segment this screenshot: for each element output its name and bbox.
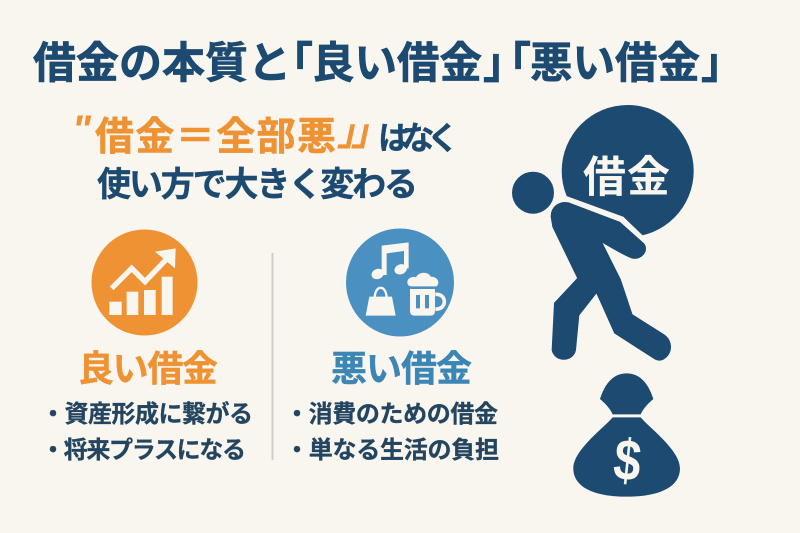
list: bad debt: ・消費のための借金	[285, 401, 498, 428]
subtitle: 使い方で大きく変わる	[97, 166, 418, 204]
title	[33, 40, 744, 88]
body	[552, 199, 670, 360]
title: 良い借金	[312, 40, 482, 88]
title: 悪い借金	[530, 40, 700, 88]
list: bad debt	[285, 401, 499, 464]
icon: money bag	[573, 373, 680, 497]
subtitle: 」	[349, 111, 396, 154]
icon: person carrying debt	[512, 105, 694, 360]
heading: good debt: 良い借金	[78, 348, 218, 389]
title: 」	[701, 40, 744, 88]
list: good debt: ・将来プラスになる	[41, 437, 246, 464]
subtitle: はなく	[378, 120, 459, 156]
title: 」	[483, 40, 526, 88]
heading: bad debt: 悪い借金	[331, 348, 472, 389]
ball label: 借金	[583, 154, 670, 202]
title: 「	[488, 40, 531, 88]
icon: rising chart	[92, 230, 198, 336]
subtitle: 借金＝全部悪	[95, 116, 336, 159]
title: 「	[270, 40, 313, 88]
list: bad debt: ・単なる生活の負担	[285, 437, 499, 464]
list: good debt	[41, 400, 253, 464]
title: 借金の本質と	[33, 40, 291, 88]
debt ball	[562, 105, 694, 237]
icon: music, shopping bag and beer	[346, 228, 454, 336]
head	[512, 172, 554, 214]
list: good debt: ・資産形成に繋がる	[41, 400, 253, 428]
subtitle: 」	[335, 111, 382, 154]
subtitle	[72, 108, 459, 204]
dollar sign: $	[611, 427, 644, 494]
subtitle: "	[72, 108, 92, 152]
divider	[272, 253, 274, 460]
